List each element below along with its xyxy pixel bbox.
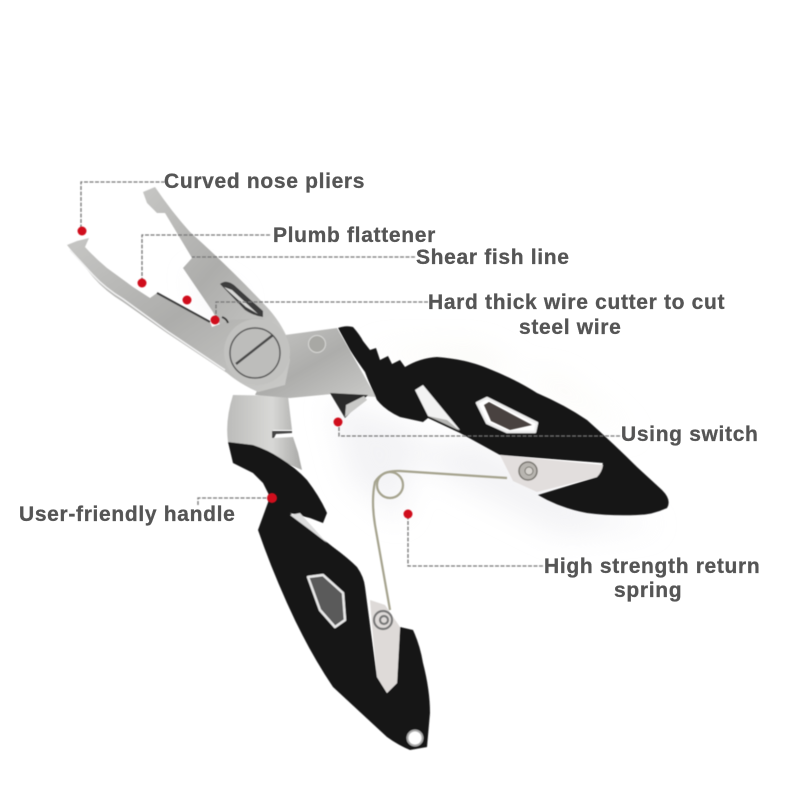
upper handle steel: [255, 328, 376, 398]
pivot screw: [230, 328, 280, 378]
label: user-friendly handle: User-friendly handle: [19, 503, 235, 526]
plate rivet: [519, 462, 537, 480]
label: return spring: [544, 555, 760, 602]
lower handle window: [308, 575, 345, 627]
pliers: [67, 187, 669, 750]
lower handle slot: [290, 513, 327, 543]
rivet: [308, 336, 326, 352]
cutter gap: [157, 293, 210, 322]
label: curved nose pliers: Curved nose pliers: [164, 170, 365, 193]
handle window: [477, 398, 537, 432]
label: plumb flattener: Plumb flattener: [273, 224, 436, 247]
pivot ring: [224, 319, 290, 385]
jaw slot: [220, 282, 263, 317]
handle slot: [415, 385, 460, 430]
lower steel plate: [370, 600, 400, 693]
upper black handle: [338, 326, 669, 515]
lower jaw notch: [272, 431, 292, 438]
lower black handle: [228, 442, 430, 750]
lower jaw steel: [227, 395, 302, 470]
lanyard hole: [408, 730, 422, 746]
label: wire cutter: steel wire: [519, 316, 621, 339]
label: wire cutter: Hard thick wire cutter to cut: [428, 291, 725, 314]
label: wire cutter: [428, 291, 725, 339]
marker dots: [78, 226, 412, 518]
label: shear fish line: Shear fish line: [416, 246, 570, 269]
label: using switch: Using switch: [621, 423, 759, 446]
upper steel plate: [500, 455, 603, 492]
leader lines: [81, 182, 620, 566]
labels: [19, 170, 760, 602]
return spring: [373, 471, 507, 629]
soft shadows: [190, 270, 660, 535]
label: return spring: High strength return: [544, 555, 760, 578]
switch latch: [330, 393, 368, 418]
jaw bright edge: [70, 250, 225, 370]
upper jaw: [143, 187, 286, 350]
label: return spring: spring: [614, 579, 682, 602]
lower-left jaw: [67, 238, 290, 392]
